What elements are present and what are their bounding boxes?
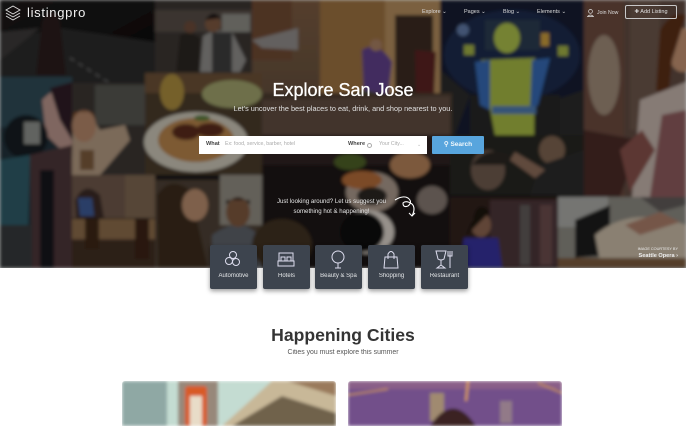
search button: ⚲ Search — [444, 141, 472, 148]
search input panel — [199, 136, 427, 154]
card: Hotels — [263, 245, 310, 289]
worker tile — [440, 0, 584, 135]
what label: What — [206, 141, 220, 147]
food tile — [144, 73, 262, 175]
city card: Griffith Observatory — [348, 381, 562, 426]
city card: Chicago — [122, 381, 336, 426]
image credit — [638, 247, 678, 259]
search bar — [199, 136, 484, 154]
credit caption: IMAGE COURTESY BY — [638, 247, 678, 251]
barista tile — [155, 0, 252, 73]
alley tile — [252, 0, 440, 135]
where placeholder: Your City... — [379, 141, 404, 147]
add listing button — [625, 5, 677, 19]
photo darkening overlay — [0, 0, 686, 268]
nav item: Elements: Elements ⌄ — [537, 9, 566, 15]
woman apron tile — [584, 0, 686, 197]
card: Automotive — [210, 245, 257, 289]
hero photo collage — [0, 0, 686, 268]
card: Hotels: Hotels — [278, 273, 295, 279]
card: Shopping — [368, 245, 415, 289]
suggestion text — [277, 198, 386, 215]
singer tile — [0, 77, 72, 268]
card: Restaurant — [421, 245, 468, 289]
where label: Where — [348, 141, 365, 147]
hero subheading: Let's uncover the best places to eat, drink, and shop nearest to you. — [234, 104, 452, 113]
add listing button: ✚ Add Listing — [634, 9, 668, 15]
suggestion text: Just looking around? Let us suggest you — [277, 198, 386, 205]
backpack tile — [72, 175, 155, 218]
icon: dropdown chevron: ⌄ — [417, 142, 421, 148]
icon: stacked layers — [5, 6, 21, 20]
card: Restaurant: Restaurant — [430, 273, 459, 279]
what placeholder: Ex: food, service, barber, hotel — [225, 141, 295, 147]
street tile — [0, 0, 155, 83]
icon: curly arrow — [394, 196, 416, 217]
icon: user — [587, 9, 594, 17]
category cards — [207, 244, 471, 294]
section heading: Happening Cities — [271, 325, 415, 345]
cobblestone tile — [72, 219, 155, 268]
suggestion text: something hot & happening! — [294, 208, 369, 215]
bookshop tile — [450, 197, 558, 267]
barber tile — [450, 135, 584, 195]
credit name: Seattle Opera › — [639, 253, 678, 259]
logo wordmark: listingpro — [27, 5, 86, 20]
icon: location dot — [367, 143, 372, 148]
navigation menu — [422, 5, 677, 19]
massage tile — [558, 197, 686, 267]
nav item: Pages: Pages ⌄ — [464, 9, 486, 15]
logo — [5, 5, 86, 20]
girl with coffee tile — [72, 83, 145, 175]
card: Beauty & Spa: Beauty & Spa — [320, 273, 357, 279]
card: Automotive: Automotive — [218, 273, 248, 279]
nav item: Explore: Explore ⌄ — [422, 9, 447, 15]
nav item: Join Now: Join Now — [597, 10, 618, 16]
card: Beauty & Spa — [315, 245, 362, 289]
card: Shopping: Shopping — [379, 273, 404, 279]
search button — [432, 136, 484, 154]
section subheading: Cities you must explore this summer — [287, 349, 399, 356]
hero heading: Explore San Jose — [272, 80, 414, 100]
cafe and table tile — [262, 93, 452, 175]
couple tile — [155, 175, 280, 268]
nav item: Blog: Blog ⌄ — [503, 9, 520, 15]
sushi tile — [252, 152, 450, 271]
